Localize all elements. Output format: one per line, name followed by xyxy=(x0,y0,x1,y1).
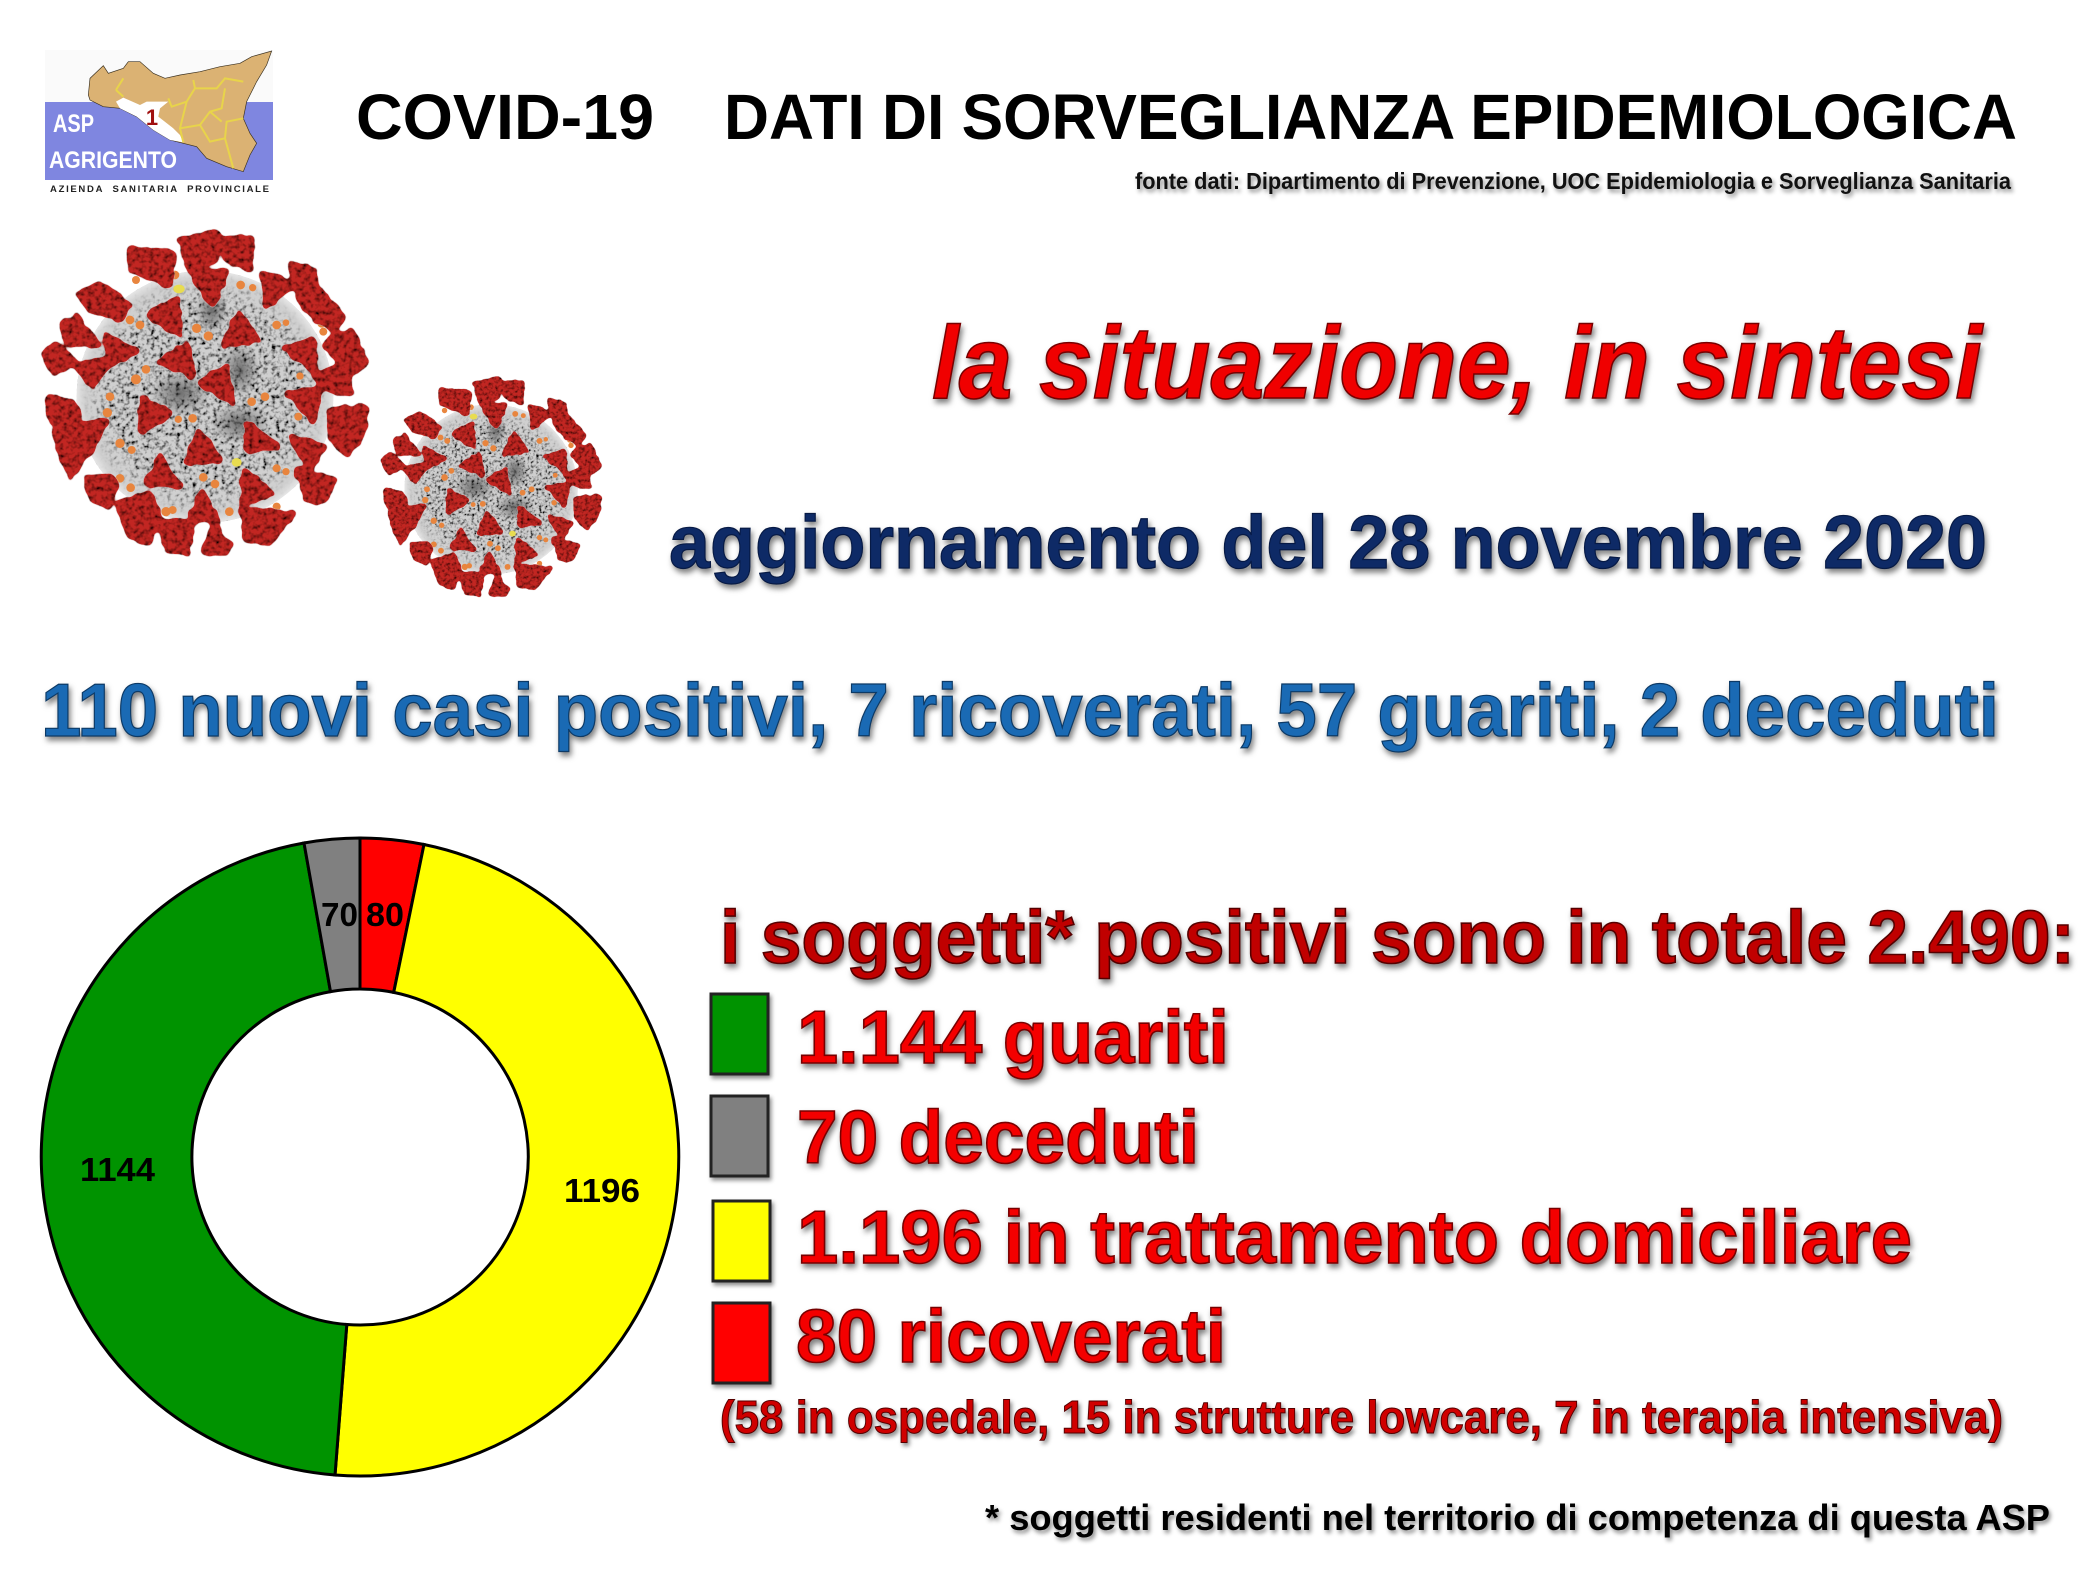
logo: ASP Agrigento xyxy=(45,50,273,195)
chart values: 70 xyxy=(321,896,358,933)
map of Sicily xyxy=(88,51,272,172)
chart values: 1196 xyxy=(564,1172,640,1209)
logo: ASP Agrigento: ASP xyxy=(53,110,94,138)
icon: small coronavirus xyxy=(382,378,600,596)
slice: ricoverati 80 xyxy=(360,838,424,992)
donut chart xyxy=(41,838,679,1476)
chart values: 80 xyxy=(366,896,404,933)
slice: guariti 1144 xyxy=(41,843,347,1475)
chart values xyxy=(80,896,640,1209)
hospitalization detail: (58 in ospedale, 15 in strutture lowcare, 7 in terapia intensiva) xyxy=(720,1391,2003,1443)
logo: ASP Agrigento: AGRIGENTO xyxy=(49,147,177,174)
legend item: guariti: 1.144 guariti xyxy=(797,995,1229,1079)
slice: domiciliare 1196 xyxy=(335,844,679,1476)
heading: la situazione: la situazione, in sintesi xyxy=(932,305,1984,420)
title: dati di sorveglianza: DATI DI SORVEGLIANZA EPIDEMIOLOGICA xyxy=(724,81,2017,153)
heading: total positives: i soggetti* positivi sono in totale 2.490: xyxy=(720,895,2075,979)
chart values: 1144 xyxy=(80,1151,156,1188)
title: COVID-19: COVID-19 xyxy=(356,81,654,153)
icon: large coronavirus xyxy=(43,232,367,555)
date heading: aggiornamento del 28 novembre 2020 xyxy=(669,500,1987,584)
legend item: ricoverati: 80 ricoverati xyxy=(796,1294,1226,1378)
logo: ASP Agrigento: 1 xyxy=(146,105,158,130)
daily summary: 110 nuovi casi positivi, 7 ricoverati, 57 guariti, 2 deceduti xyxy=(41,668,1999,752)
footnote: * soggetti residenti nel territorio di competenza di questa ASP xyxy=(985,1497,2050,1538)
logo: ASP Agrigento: AZIENDA SANITARIA PROVINCIALE xyxy=(50,184,269,195)
legend item: domiciliare: 1.196 in trattamento domiciliare xyxy=(797,1195,1912,1279)
slice: deceduti 70 xyxy=(304,838,360,992)
source note: fonte dati: Dipartimento di Prevenzione, UOC Epidemiologia e Sorveglianza Sanitaria xyxy=(1135,168,2011,194)
legend item: deceduti: 70 deceduti xyxy=(797,1095,1199,1179)
